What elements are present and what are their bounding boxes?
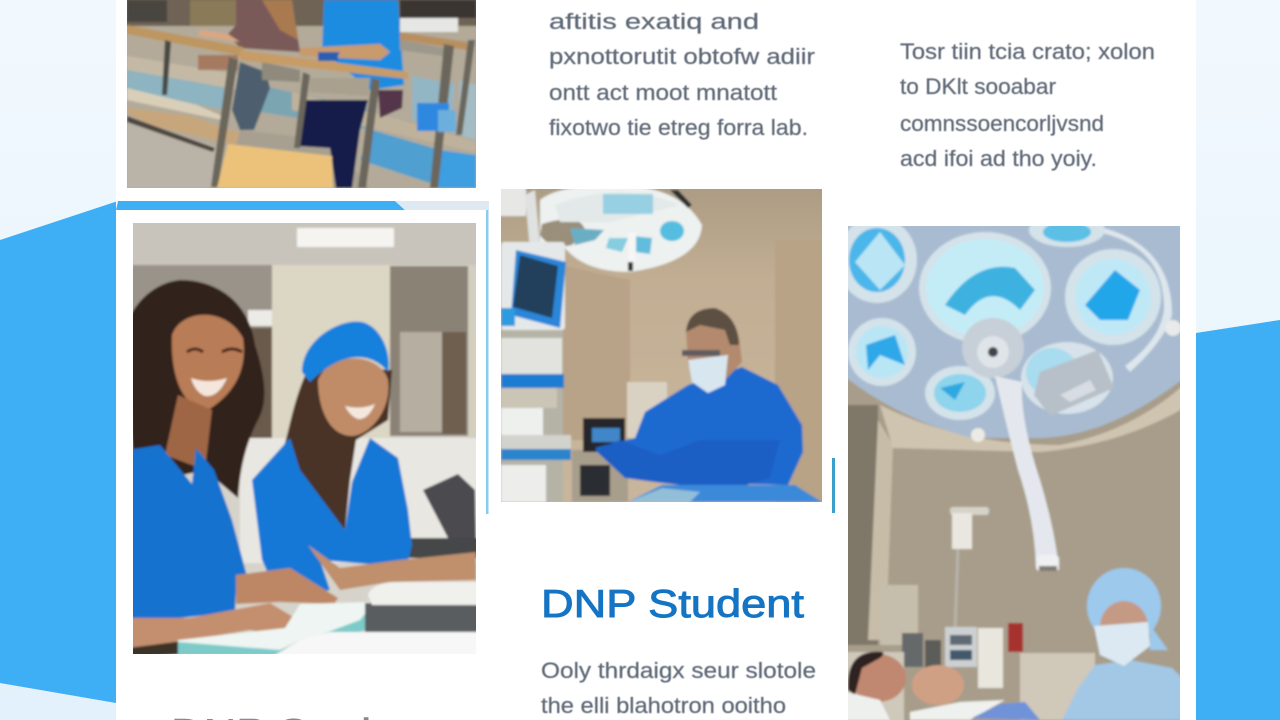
monitor bbox=[501, 242, 566, 330]
photo: operating room bbox=[837, 213, 1184, 720]
surgeon sleeves bbox=[595, 440, 780, 487]
surgical lamp heads bbox=[837, 213, 1181, 420]
text block: bottom centre: Ooly thrdaigx seur slotole bbox=[541, 658, 816, 683]
text block: bottom centre bbox=[541, 658, 816, 718]
text block: top right: acd ifoi ad tho yoiy. bbox=[900, 146, 1097, 171]
left nurse scrubs bbox=[128, 445, 248, 618]
text block: top centre: aftitis exatiq and bbox=[549, 9, 759, 34]
background shape: left blue band bbox=[0, 201, 405, 703]
right nurse cap bbox=[302, 322, 389, 382]
white panel bbox=[627, 382, 667, 438]
right nurse hair bbox=[283, 365, 392, 530]
text block: top right: comnssoencorljvsnd bbox=[900, 111, 1104, 136]
left dark wall bbox=[844, 405, 878, 645]
accent tick beside surgeon photo bbox=[832, 458, 835, 513]
text block: top centre: fixotwo tie etreg forra lab. bbox=[549, 115, 808, 140]
photo: classroom bbox=[120, 0, 480, 192]
text block: top right: Tosr tiin tcia crato; xolon bbox=[900, 39, 1155, 64]
photo: two nurses bbox=[128, 218, 480, 658]
ceiling band bbox=[880, 385, 1184, 452]
wall counter bbox=[1020, 653, 1095, 720]
woman in brown top bbox=[228, 0, 300, 52]
desks bbox=[127, 25, 243, 56]
back wall panels bbox=[128, 265, 274, 440]
back wall and dark row bbox=[120, 0, 480, 26]
left arm and hand bbox=[128, 603, 305, 648]
left nurse hair bbox=[128, 280, 264, 500]
photo: surgeon bbox=[496, 184, 827, 507]
background shape: right blue band bbox=[1196, 320, 1280, 720]
ceiling lamp bbox=[496, 184, 702, 272]
panel top strip bbox=[116, 201, 405, 210]
text block: top centre: ontt act moot mnatott bbox=[549, 80, 777, 105]
patient bbox=[844, 652, 1040, 720]
blue box bbox=[417, 103, 449, 131]
lamp housing bbox=[844, 222, 1184, 438]
wooden chair bbox=[217, 144, 333, 188]
left nurse neck bbox=[165, 395, 212, 470]
text block: top centre: pxnottorutit obtofw adiir bbox=[549, 44, 815, 69]
equipment stack bbox=[501, 330, 628, 502]
surgeon gown bbox=[595, 367, 803, 485]
desk bbox=[365, 603, 480, 633]
student in blue bbox=[322, 0, 404, 90]
surgeon head bbox=[686, 324, 742, 380]
text block: top centre bbox=[549, 9, 815, 140]
nurse in cap and mask bbox=[1062, 568, 1184, 720]
right nurse scrubs bbox=[252, 438, 412, 600]
panel top strip pale end bbox=[395, 201, 489, 210]
desk with gray drawer bbox=[310, 78, 370, 96]
hand on book bbox=[236, 568, 338, 604]
right nurse arm bbox=[308, 545, 476, 590]
text block: top right bbox=[900, 39, 1155, 171]
heading: DNP Student: DNP Student bbox=[541, 583, 804, 626]
white items bbox=[400, 18, 458, 32]
left nurse face bbox=[172, 315, 244, 410]
navy legs bbox=[298, 100, 368, 188]
blue riser rows bbox=[127, 65, 225, 110]
book bbox=[178, 602, 370, 652]
lower left bench bbox=[127, 88, 222, 120]
text block: top right: to DKlt sooabar bbox=[900, 74, 1056, 99]
lamp arm bbox=[995, 376, 1059, 570]
surgeon mask bbox=[688, 355, 728, 393]
woman jeans bbox=[232, 62, 270, 130]
bed bbox=[628, 485, 822, 502]
chair bbox=[423, 474, 476, 538]
IV pole and pump bbox=[902, 507, 1023, 688]
right nurse face bbox=[318, 358, 388, 436]
desk legs bbox=[162, 40, 171, 95]
card edge accent bbox=[486, 210, 488, 514]
text block: bottom centre: the elli blahotron ooitho bbox=[541, 693, 786, 718]
